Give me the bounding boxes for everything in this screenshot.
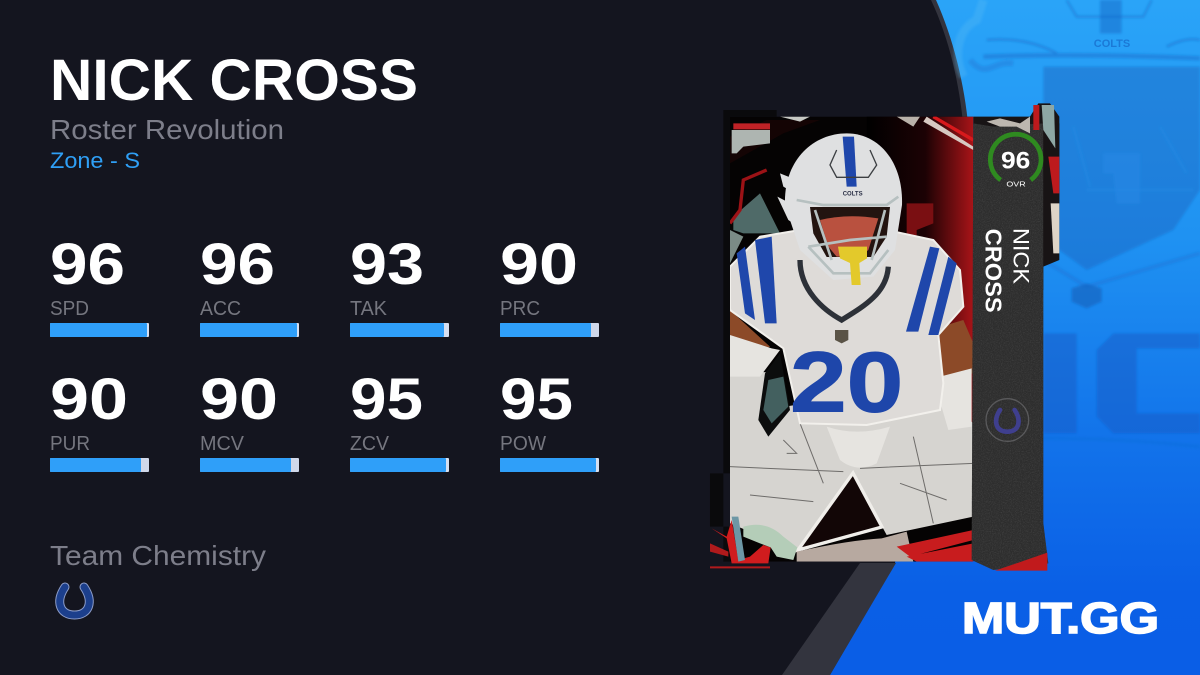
bottom-left torn graphics — [710, 517, 797, 567]
stat: ACC 96: 96 — [200, 232, 275, 297]
stat: POW 95 — [500, 367, 599, 472]
subtitle: Roster Revolution — [50, 114, 284, 145]
stat: SPD 96: SPD — [50, 298, 89, 320]
helmet visor hexagon — [830, 150, 877, 177]
background red panels — [867, 116, 974, 422]
stat: MCV 90: MCV — [200, 433, 245, 455]
logo: MUT.GG: MUT.GG — [962, 594, 1159, 643]
teal gap behind arm — [758, 353, 790, 437]
NFL shield — [835, 330, 848, 343]
overall rating ring: 96 — [1001, 148, 1030, 175]
jersey collar — [800, 260, 888, 320]
beige torn hem — [797, 532, 913, 562]
stat: ACC 96: ACC — [200, 298, 241, 320]
stat: POW 95: 95 — [500, 367, 573, 432]
title: NICK CROSS — [50, 48, 418, 113]
pants — [730, 370, 973, 552]
vertical name: NICK — [1008, 228, 1033, 284]
card photo — [730, 117, 973, 562]
stat: TAK 93: 93 — [350, 232, 424, 297]
red corner label — [995, 553, 1047, 571]
stat: PUR 90: PUR — [50, 433, 90, 455]
position: Zone - S — [50, 148, 140, 173]
ghost helmet wordmark: COLTS — [1094, 38, 1130, 50]
yellow mouthguard — [838, 247, 867, 285]
stat: MCV 90: 90 — [200, 367, 278, 432]
strip right decoration — [1043, 123, 1059, 267]
player card — [710, 103, 1059, 571]
overall rating ring — [990, 134, 1041, 189]
diagonal grey band — [782, 563, 896, 675]
stat: SPD 96 — [50, 232, 149, 337]
strip top torn edge — [987, 117, 1030, 133]
blue sleeve stripes — [755, 237, 777, 323]
stat: ZCV 95 — [350, 367, 449, 472]
face mask — [797, 197, 898, 273]
face opening — [810, 207, 890, 257]
red lower stripes — [897, 530, 973, 562]
jersey number: 20 — [790, 336, 903, 431]
stat: PRC 90: PRC — [500, 298, 540, 320]
jersey — [730, 230, 963, 425]
stat: MCV 90 — [200, 367, 299, 472]
stat: ACC 96 — [200, 232, 299, 337]
team badge — [986, 399, 1029, 441]
pants creases — [730, 423, 973, 523]
helmet — [785, 133, 902, 280]
black gap between legs — [798, 473, 882, 550]
team chemistry heading: Team Chemistry — [50, 540, 266, 571]
card frame back pieces — [710, 110, 777, 562]
stat: PRC 90: 90 — [500, 232, 578, 297]
player arms — [730, 310, 973, 380]
stat: TAK 93: TAK — [350, 298, 388, 320]
right card top tab — [973, 103, 1059, 290]
ghost player artwork on blue — [900, 0, 1200, 447]
vertical name: CROSS — [980, 229, 1006, 313]
stat: SPD 96: 96 — [50, 232, 125, 297]
stat: ZCV 95: 95 — [350, 367, 423, 432]
stat: PRC 90 — [500, 232, 599, 337]
sleeves — [730, 335, 972, 430]
icon: Colts horseshoe — [60, 587, 89, 615]
stat: TAK 93 — [350, 232, 449, 337]
card photo: COLTS — [843, 191, 863, 197]
stat: PUR 90: 90 — [50, 367, 128, 432]
blue hero panel — [782, 0, 1200, 675]
stat: ZCV 95: ZCV — [350, 433, 390, 455]
stat: PUR 90 — [50, 367, 149, 472]
top grey edge band — [931, 0, 969, 135]
vertical name — [980, 228, 1033, 313]
overall rating ring: OVR — [1006, 180, 1026, 189]
card side strip — [972, 123, 1048, 570]
stat: POW 95: POW — [500, 433, 546, 455]
